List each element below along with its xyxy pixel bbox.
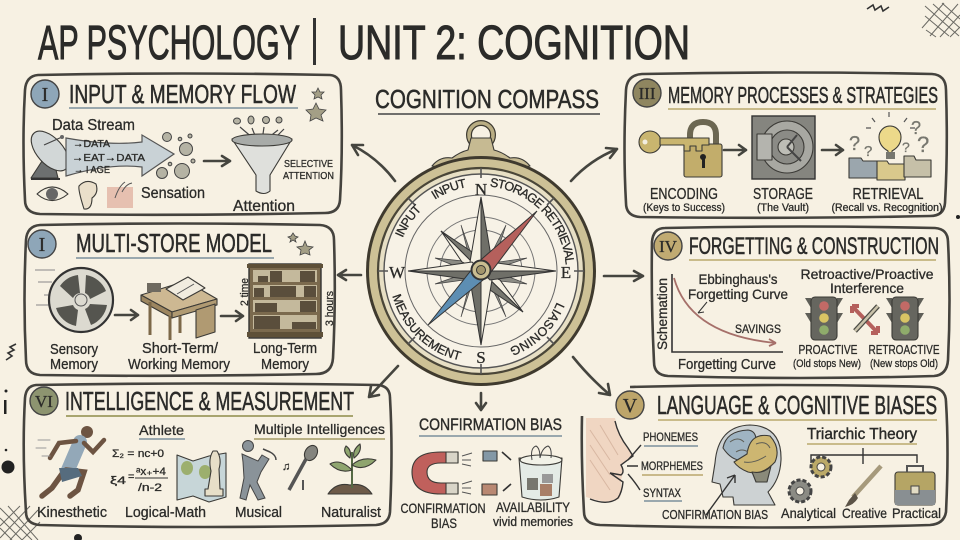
- text: confirmation bias: CONFIRMATION BIAS: [662, 507, 768, 522]
- compass ring labels: LIASONING: [510, 302, 564, 355]
- compass cardinal letters: [389, 180, 571, 367]
- chart: forgetting curve: Schemation: [654, 278, 670, 350]
- badge VI: [30, 387, 58, 415]
- labels: (New stops Old): [870, 358, 938, 370]
- labels: RETROACTIVE: [868, 343, 940, 357]
- triarchic theory: [807, 426, 917, 464]
- icon: skin: [107, 182, 133, 208]
- icon: eye: [37, 187, 68, 200]
- heading: MULTI-STORE MODEL: [76, 228, 272, 258]
- chart: forgetting curve: SAVINGS: [735, 322, 781, 336]
- labels: [643, 186, 942, 214]
- connector lines: [627, 445, 641, 490]
- compass rose: [408, 197, 556, 345]
- text: formulas: ξ4: [110, 475, 126, 487]
- icon: bookshelf: [247, 264, 323, 338]
- stars: [306, 88, 326, 121]
- badge I: I: [42, 84, 48, 106]
- labels: [781, 505, 941, 521]
- arrow: data stream: → I AGE: [74, 165, 110, 176]
- chart: forgetting curve: Forgetting Curve: [678, 356, 776, 373]
- icon: glass: [519, 446, 562, 500]
- badge I: [31, 80, 59, 108]
- icon: briefcase: [895, 466, 935, 505]
- compass cardinal letters: N: [475, 180, 487, 199]
- title: UNIT 2: COGNITION: [338, 17, 690, 70]
- text: formulas: [110, 448, 168, 494]
- compass ring labels: [392, 178, 574, 360]
- text: multiple intelligences: Multiple Intelligences: [254, 421, 385, 437]
- icon: key and padlock: [639, 122, 722, 177]
- icon: lightbulb, question marks and folders: ?: [849, 133, 860, 155]
- text: 2 time: 2 time: [239, 278, 251, 306]
- text: selective attention: SELECTIVE: [284, 158, 333, 170]
- badge I: [28, 230, 56, 258]
- chart: forgetting curve: [654, 271, 788, 373]
- heading: cognition compass: COGNITION COMPASS: [375, 84, 599, 114]
- labels: Memory: [261, 356, 309, 373]
- labels: Logical-Math: [125, 504, 206, 521]
- labels: Short-Term/: [142, 340, 219, 357]
- icon: microphone and notes: [282, 443, 320, 490]
- icon: face profile: [586, 418, 633, 502]
- arrow: [221, 311, 243, 321]
- text: interference: [800, 266, 934, 296]
- compass ring labels: STORAGE: [490, 178, 544, 209]
- text: formulas: =: [128, 471, 134, 483]
- icon: satellite dish: [24, 124, 76, 179]
- labels: Naturalist: [321, 504, 382, 521]
- icon: ear: [79, 181, 97, 209]
- panel: language and cognitive biases: [582, 385, 948, 528]
- icon: head with brain: [706, 425, 781, 515]
- text: formulas: /n-2: [138, 482, 162, 494]
- labels: phonemes: PHONEMES: [643, 430, 698, 444]
- labels: (The Vault): [757, 202, 809, 214]
- labels: Analytical: [781, 505, 836, 521]
- compass case: [366, 156, 596, 386]
- panel: multi-store model: [24, 224, 336, 376]
- badge V: [616, 391, 644, 419]
- text: interference: Retroactive/Proactive: [800, 266, 934, 282]
- icon: vault: [752, 116, 815, 179]
- arrow: data stream: →EAT→DATA: [72, 152, 145, 164]
- badge VI: VI: [35, 392, 53, 411]
- icon: magnet: [412, 452, 458, 494]
- text: attention: Attention: [233, 198, 295, 215]
- icon: map and statue: [177, 451, 226, 502]
- compass ring labels: INPUT: [395, 204, 420, 238]
- labels: (Old stops New): [793, 358, 861, 370]
- triarchic theory: Triarchic Theory: [807, 426, 917, 443]
- icon: desk: [141, 277, 217, 340]
- labels: [37, 504, 382, 521]
- stars: [288, 233, 313, 255]
- labels: Long-Term: [253, 340, 317, 357]
- labels: Practical: [892, 505, 941, 521]
- text: sensation: Sensation: [141, 185, 205, 202]
- compass cardinal letters: E: [561, 263, 571, 282]
- labels: [793, 343, 940, 370]
- panel: memory processes and strategies: [624, 72, 947, 218]
- text: selective attention: [283, 158, 334, 182]
- icon: lightbulb, question marks and folders: ?: [917, 132, 929, 157]
- compass ring labels: INPUT: [431, 178, 465, 200]
- labels: Memory: [50, 356, 98, 373]
- icon: traffic lights: [805, 297, 924, 340]
- text: formulas: Σ₂ = nc+0: [112, 448, 164, 460]
- arrow: [822, 145, 843, 155]
- badge III: III: [639, 84, 656, 103]
- compass ring labels: RETRIEVAL: [541, 205, 574, 265]
- icon: plant: [328, 444, 376, 494]
- icon: paintbrush: [845, 466, 881, 507]
- chart: forgetting curve: Forgetting Curve: [688, 286, 788, 302]
- heading: INPUT & MEMORY FLOW: [69, 79, 296, 109]
- arrow: [204, 156, 230, 166]
- text: formulas: ᵃx₊+4: [136, 466, 166, 478]
- labels: [400, 499, 573, 531]
- panel: intelligence and measurement: [24, 384, 391, 527]
- labels: CONFIRMATION: [400, 500, 486, 516]
- arrow: [115, 310, 138, 320]
- icon: runner: [36, 426, 104, 496]
- text: athlete: Athlete: [139, 422, 184, 438]
- panel: input and memory flow: [24, 74, 342, 215]
- arrow: data stream: →DATA: [73, 138, 110, 150]
- icon: flying cards: [462, 451, 511, 495]
- labels: [50, 340, 317, 373]
- labels: Kinesthetic: [37, 504, 107, 521]
- badge III: [633, 79, 661, 107]
- icon: funnel: [232, 116, 292, 194]
- icon: lightbulb, question marks and folders: [849, 112, 931, 180]
- icon: singer: [240, 440, 276, 500]
- labels: STORAGE: [753, 186, 813, 203]
- labels: ENCODING: [650, 186, 718, 203]
- icon: lightbulb, question marks and folders: ?: [902, 139, 910, 155]
- badge IV: [654, 232, 682, 260]
- labels: AVAILABILITY: [496, 499, 571, 515]
- title: AP PSYCHOLOGY: [38, 17, 300, 70]
- labels: Sensory: [50, 341, 98, 358]
- text: data stream: Data Stream: [52, 117, 135, 134]
- compass: [366, 120, 596, 386]
- compass ring labels: MEASUREMENT: [392, 294, 462, 360]
- labels: phonemes: SYNTAX: [643, 486, 681, 500]
- badge IV: IV: [659, 237, 678, 256]
- text: selective attention: ATTENTION: [283, 170, 334, 182]
- labels: Working Memory: [128, 356, 230, 373]
- panel: forgetting and construction: [652, 226, 950, 378]
- arrow: [724, 145, 746, 155]
- particles: [156, 132, 195, 178]
- labels: PROACTIVE: [798, 343, 858, 357]
- heading: CONFIRMATION BIAS: [419, 415, 562, 434]
- icon: film reel: [35, 268, 113, 332]
- icon: crossed arrows: [852, 306, 878, 333]
- icon: lightbulb, question marks and folders: ?: [911, 118, 921, 138]
- labels: (Recall vs. Recognition): [832, 202, 942, 214]
- chart: forgetting curve: Ebbinghaus's: [698, 271, 778, 287]
- compass needle: [428, 211, 537, 325]
- badge V: V: [623, 395, 638, 417]
- labels: Musical: [235, 504, 282, 521]
- arrow: data stream: [66, 135, 174, 176]
- compass loop and crown: [432, 123, 530, 167]
- labels: BIAS: [431, 515, 457, 531]
- compass cardinal letters: S: [476, 348, 486, 367]
- text: interference: Interference: [830, 280, 904, 296]
- compass cardinal letters: W: [389, 263, 406, 282]
- labels: phonemes: [641, 430, 703, 501]
- title: [38, 17, 690, 70]
- badge I: I: [39, 234, 45, 256]
- labels: phonemes: MORPHEMES: [641, 459, 703, 473]
- icon: microphone and notes: ♫: [282, 461, 290, 473]
- labels: (Keys to Success): [643, 202, 725, 214]
- labels: RETRIEVAL: [852, 186, 924, 203]
- heading: INTELLIGENCE & MEASUREMENT: [65, 386, 354, 416]
- icon: gears: [789, 457, 831, 502]
- icon: lightbulb, question marks and folders: ?: [864, 143, 872, 160]
- labels: Creative: [842, 505, 887, 521]
- arrows from compass: [338, 145, 643, 410]
- text: 3 hours: 3 hours: [324, 291, 336, 326]
- labels: vivid memories: [493, 514, 573, 529]
- panel: confirmation bias: [400, 415, 573, 531]
